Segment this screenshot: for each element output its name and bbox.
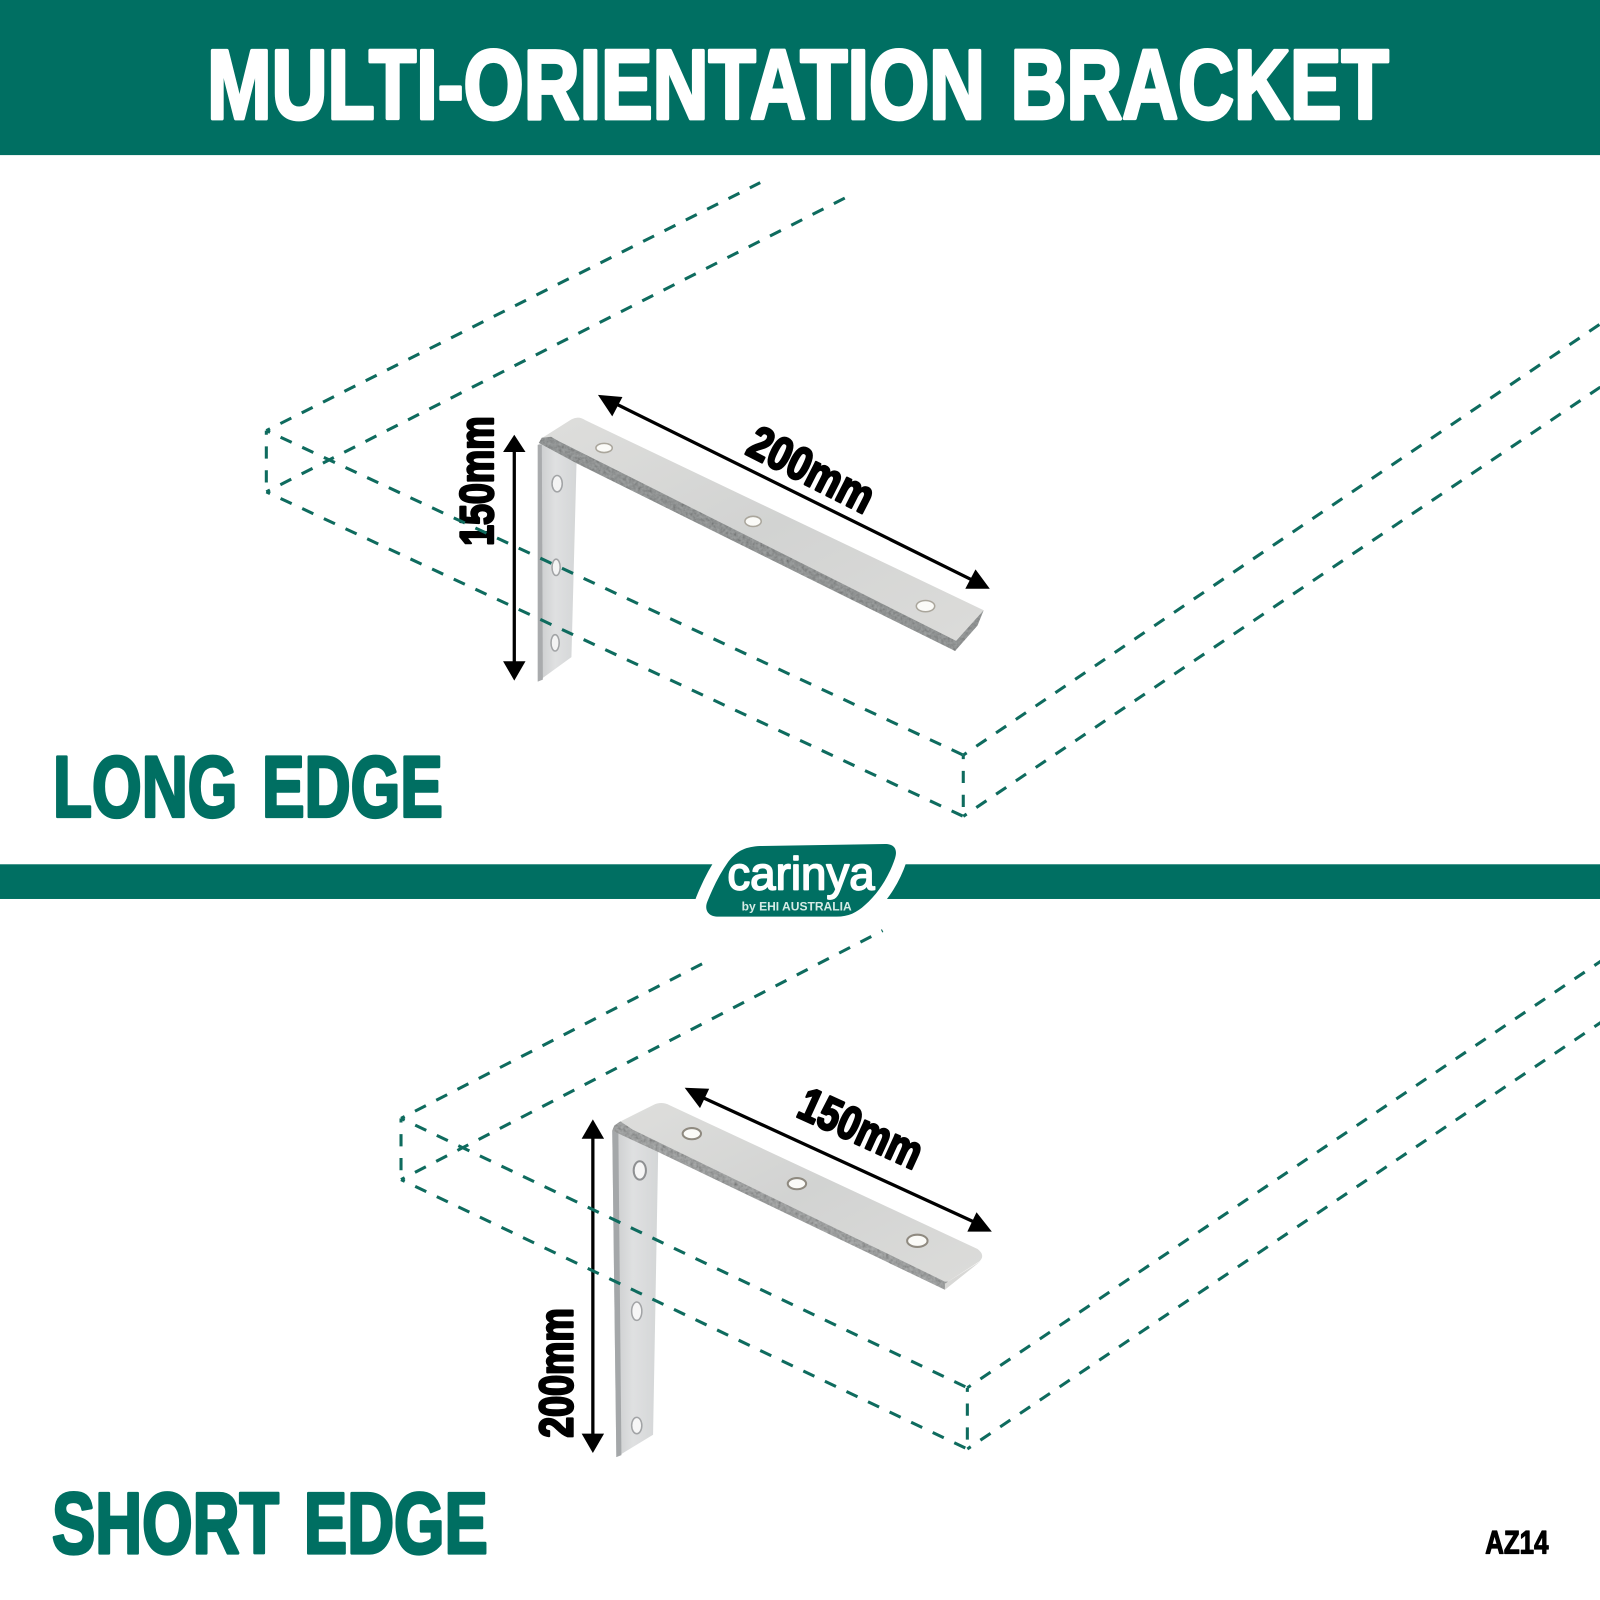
long edge bracket <box>538 418 984 682</box>
header banner <box>0 0 1600 155</box>
heading: short edge: SHORT EDGE <box>52 1475 488 1572</box>
label: 150mm: 150mm <box>791 1078 931 1179</box>
label: 200mm vertical: 200mm <box>530 1308 582 1438</box>
logo: carinya <box>706 844 896 917</box>
heading: long edge: LONG EDGE <box>53 738 443 835</box>
divider band <box>0 864 1600 899</box>
long edge shelf outline <box>266 183 1600 816</box>
logo: carinya: carinya <box>727 847 875 899</box>
arrow: 150mm short edge <box>685 1088 992 1232</box>
short edge shelf outline <box>401 931 1600 1449</box>
product code: AZ14 <box>1485 1524 1548 1561</box>
label: 200mm: 200mm <box>740 416 883 523</box>
arrow: 150mm long edge <box>503 435 526 681</box>
arrow: 200mm long edge <box>598 395 990 589</box>
label: 150mm vertical: 150mm <box>451 416 503 546</box>
arrow: 200mm short edge <box>582 1119 604 1453</box>
logo: carinya: by EHI AUSTRALIA <box>742 900 852 914</box>
short edge bracket <box>612 1103 982 1457</box>
